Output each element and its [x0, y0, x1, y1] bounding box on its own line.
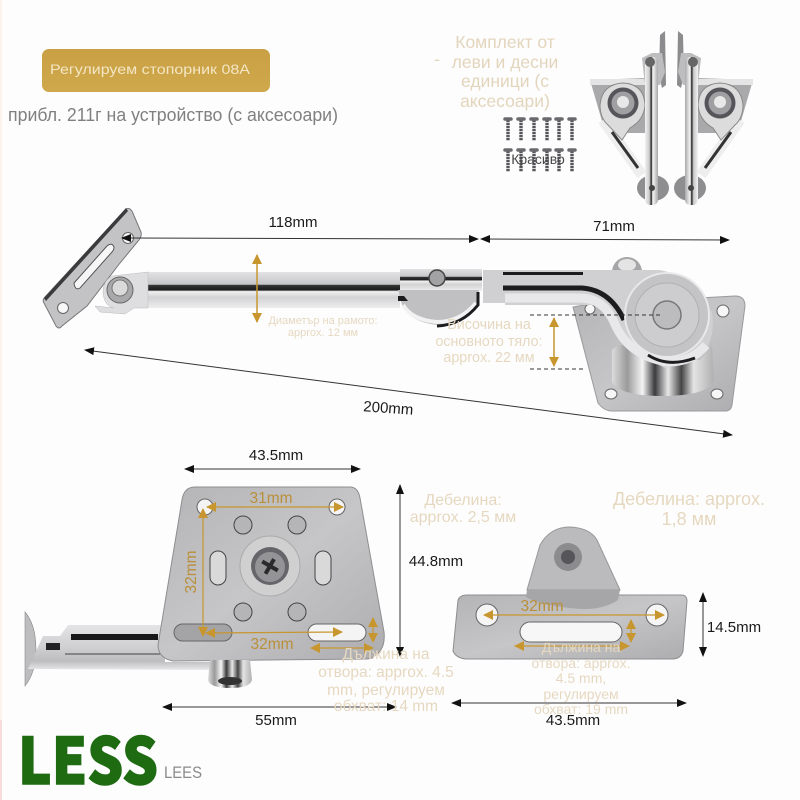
set description: - [434, 49, 440, 69]
set description: аксесоари) [460, 91, 550, 111]
brand sublabel: LEES [164, 763, 202, 782]
slot note 19: 4.5 mm, [556, 670, 606, 686]
square mounting plate [158, 487, 384, 661]
left edge tint [0, 0, 2, 720]
hinge pair photo [590, 31, 753, 205]
weight note: прибл. 211г на устройство (с аксесоари) [8, 105, 338, 125]
dimension: 200mm [85, 350, 732, 435]
caption over screws: Красиво [511, 151, 565, 167]
slot note 14: mm, регулируем [327, 682, 445, 699]
plate gold dimensions: 32mm [250, 636, 294, 653]
icon: screws [505, 119, 575, 172]
dimension: 14.5mm [703, 593, 761, 656]
main stay: left bracket [43, 208, 141, 328]
body height marker: основното тяло: [435, 334, 543, 350]
title badge [42, 49, 270, 92]
set description [434, 32, 558, 111]
thickness note 2.5: Дебелина: [424, 492, 502, 509]
slot note 14: отвора: approx. 4.5 [318, 664, 454, 681]
dimension: 44.8mm: 44.8mm [409, 553, 463, 570]
dimension: 43.5mm top: 43.5mm [249, 447, 303, 464]
slot note 14: Дължина на [343, 646, 430, 663]
body height marker: Височина на [447, 317, 531, 333]
centre screw [240, 536, 300, 596]
thickness note 2.5: approx. 2,5 мм [410, 509, 516, 526]
main stay: long arm [95, 269, 482, 326]
arm diameter marker: Диаметър на рамото: [268, 315, 378, 327]
set description: единици (с [461, 71, 549, 91]
lug bracket [453, 527, 687, 659]
title badge: Регулируем стопорник 08A [50, 61, 251, 77]
slot note 19: обхват: 19 mm [534, 701, 628, 717]
thickness note 1.8: Дебелина: approx. [613, 489, 765, 509]
dimension: 118mm: 118mm [269, 214, 317, 231]
dimension: 55mm: 55mm [255, 712, 297, 729]
set description: леви и десни [452, 52, 558, 72]
thickness note 1.8 [613, 489, 765, 529]
dimension: 43.5mm bottom: 43.5mm [546, 712, 600, 729]
main stay: base plate and swivel body [483, 257, 745, 411]
slot note 19: отвора: approx. [531, 655, 631, 671]
right hinge [674, 31, 753, 205]
slot note 14 [318, 646, 454, 715]
arm diameter marker [257, 255, 378, 339]
body height marker: approx. 22 мм [443, 350, 535, 366]
thickness note 2.5 [410, 492, 516, 526]
plate gold dimensions [183, 490, 373, 653]
dimension: 71mm: 71mm [593, 218, 635, 235]
lower stay rod [25, 612, 215, 686]
slot note 14: обхват: 14 mm [334, 698, 438, 715]
body height marker [435, 315, 660, 369]
slot note 19 [531, 639, 631, 717]
plate gold dimensions: 31mm [249, 490, 293, 507]
left hinge [590, 31, 669, 205]
lower knob [208, 660, 252, 688]
slot note 19: Дължина на [542, 639, 620, 655]
slot note 19: регулируем [543, 686, 619, 702]
left edge tint lower [0, 720, 2, 800]
set description: Комплект от [455, 32, 555, 52]
thickness note 1.8: 1,8 мм [662, 509, 716, 529]
arm diameter marker: approx. 12 мм [288, 327, 358, 339]
plate gold dimensions: 32mm [183, 550, 200, 594]
plate holes [174, 499, 366, 641]
lug gold dimensions: 32mm [520, 598, 564, 615]
dimension: 14.5mm: 14.5mm [707, 619, 761, 636]
dimension: 200mm: 200mm [363, 398, 414, 419]
